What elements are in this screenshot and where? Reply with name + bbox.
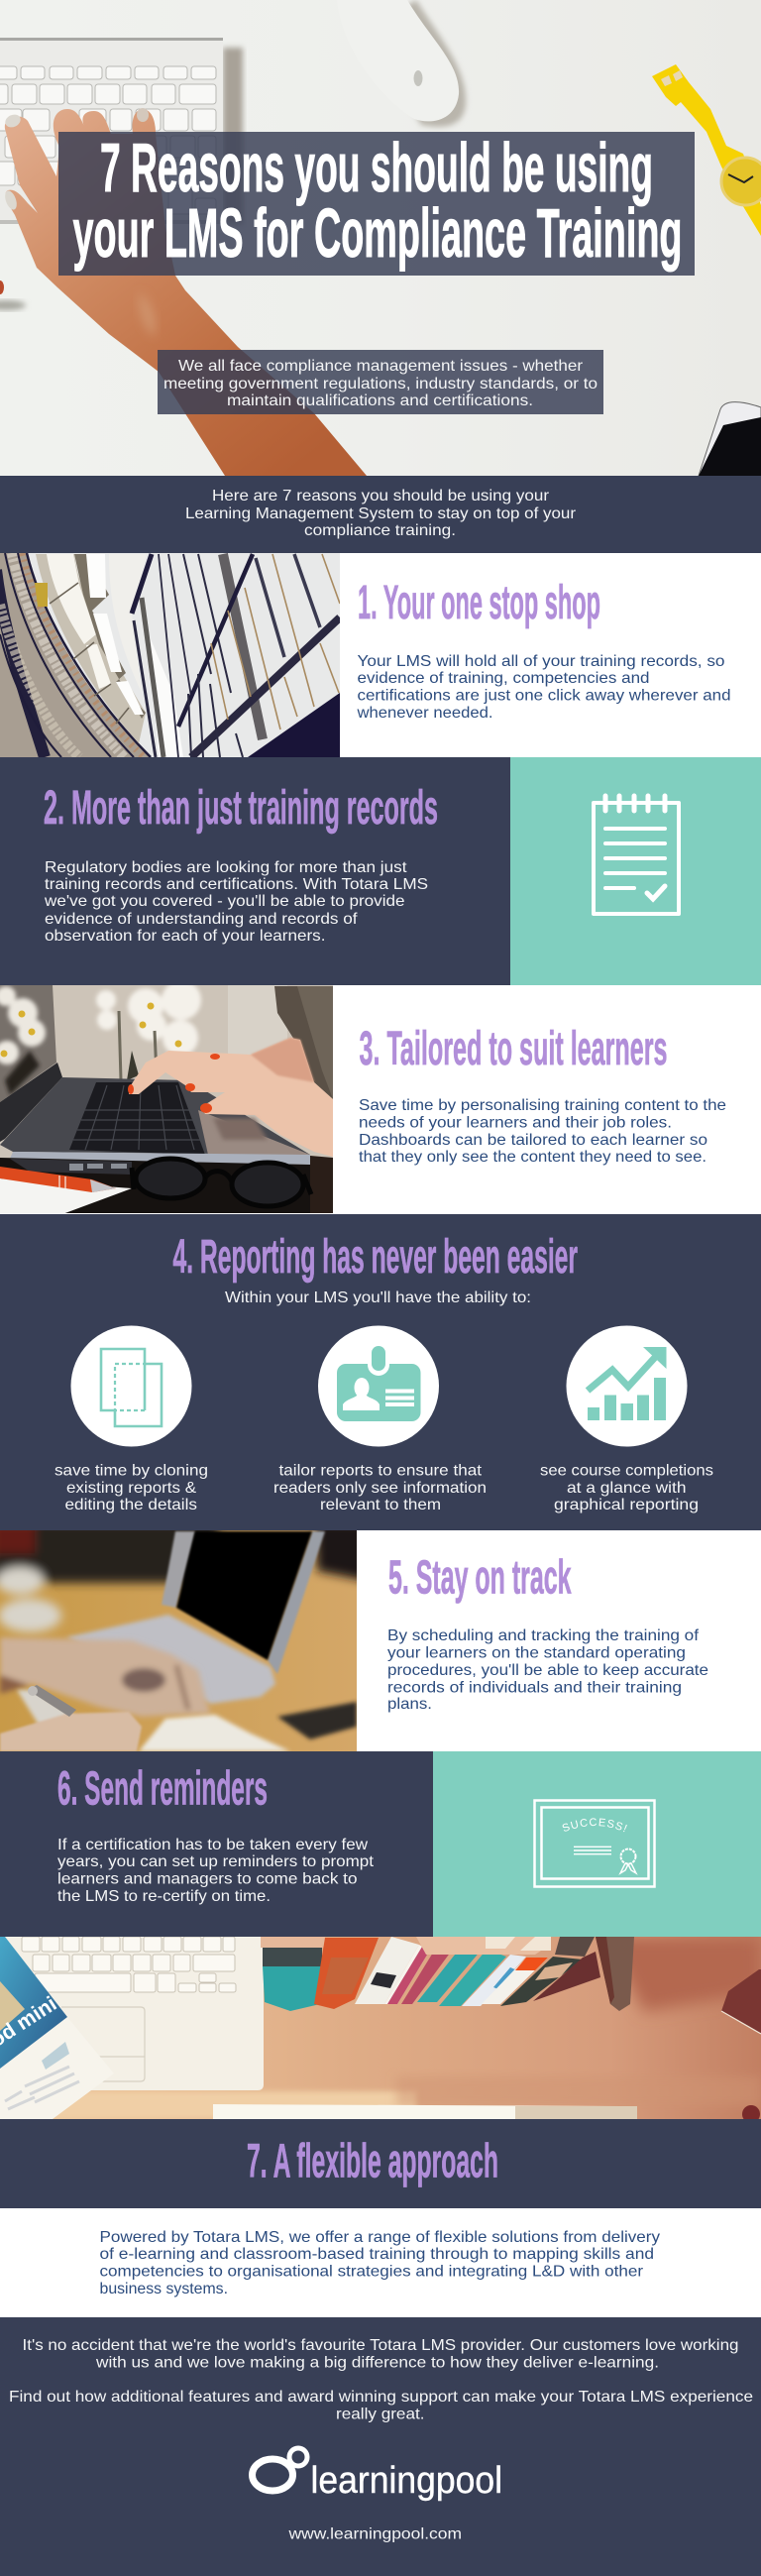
intro text — [185, 488, 577, 539]
subtitle text: maintain qualifications and certifications. — [227, 392, 533, 409]
closing text: It's no accident that we're the world's favourite Totara LMS provider. Our customers love working — [22, 2337, 739, 2354]
caption 2 — [273, 1463, 487, 1513]
body 7: competencies to organisational strategies and integrating L&D with other — [99, 2264, 644, 2280]
panel: reason 1 — [0, 553, 761, 757]
website address: www.learningpool.com — [287, 2525, 462, 2543]
watch — [652, 64, 761, 236]
body 5: procedures, you'll be able to keep accurate — [387, 1662, 708, 1679]
body 2: we've got you covered - you'll be able to provide — [44, 893, 405, 910]
body 2: Regulatory bodies are looking for more than just — [45, 859, 407, 876]
body 2: evidence of understanding and records of — [45, 911, 358, 928]
body 6: learners and managers to come back to — [57, 1871, 358, 1887]
icon: rising chart — [567, 1326, 688, 1447]
body 3: needs of your learners and their job roles. — [359, 1114, 672, 1132]
body 2: training records and certifications. With Totara LMS — [45, 876, 428, 893]
subtitle text — [163, 358, 598, 409]
body 5 — [387, 1627, 708, 1713]
body 3: Save time by personalising training content to the — [359, 1097, 726, 1114]
intro band — [0, 476, 761, 553]
subtitle text: We all face compliance management issues - whether — [178, 358, 584, 375]
panel: reason 2 — [0, 757, 761, 985]
title text — [73, 129, 682, 272]
panel: reason 5 — [0, 1530, 707, 1751]
photo: writing beside a laptop — [0, 1521, 367, 1751]
heading 7: 7. A flexible approach — [247, 2135, 498, 2188]
hero photo: desk with keyboard, mouse, hand, watch and phone — [0, 0, 761, 476]
panel: reason 3 — [0, 980, 761, 1214]
body 3: Dashboards can be tailored to each learner so — [359, 1132, 707, 1149]
body 1: certifications are just one click away wherever and — [357, 688, 731, 704]
caption 1 — [54, 1463, 208, 1513]
body 3: that they only see the content they need to see. — [359, 1149, 707, 1166]
body 1: whenever needed. — [356, 705, 493, 722]
body 2: observation for each of your learners. — [45, 928, 325, 945]
caption 2: relevant to them — [320, 1497, 441, 1513]
body 7: Powered by Totara LMS, we offer a range of flexible solutions from delivery — [99, 2229, 660, 2246]
icon: success certificate: SUCCESS! — [563, 1818, 627, 1832]
body 3 — [359, 1097, 726, 1166]
intro text: Here are 7 reasons you should be using your — [212, 488, 550, 504]
caption 1: save time by cloning — [54, 1463, 208, 1479]
caption 1: editing the details — [65, 1497, 197, 1513]
subtitle text: meeting government regulations, industry standards, or to — [163, 376, 598, 392]
body 1 — [356, 653, 731, 722]
caption 2: readers only see information — [273, 1480, 487, 1497]
caption 3 — [540, 1463, 713, 1513]
caption 3: at a glance with — [567, 1480, 686, 1497]
panel: reason 6 — [0, 1751, 761, 1937]
panel: footer — [0, 2317, 761, 2576]
body 1: evidence of training, competencies and — [357, 670, 650, 687]
body 7: of e-learning and classroom-based training through to mapping skills and — [99, 2246, 654, 2263]
body 5: records of individuals and their training — [387, 1679, 682, 1697]
body 6: the LMS to re-certify on time. — [57, 1888, 271, 1905]
body 5: plans. — [387, 1696, 432, 1713]
closing text: with us and we love making a big difference to how they deliver e-learning. — [95, 2355, 659, 2371]
photo: laptop, books and magazine on wooden desk — [0, 1937, 761, 2123]
laptop — [0, 1937, 264, 2090]
panel: reason 4 — [0, 1214, 761, 1530]
mouse — [408, 0, 469, 130]
icon: notepad with checkmark — [594, 796, 679, 914]
second hand edge and shadow — [0, 280, 26, 310]
icon: cloned documents — [71, 1326, 192, 1447]
body 6: years, you can set up reminders to prompt — [57, 1853, 375, 1870]
keyboard — [0, 38, 243, 224]
body 2 — [44, 859, 428, 945]
closing text — [9, 2337, 753, 2422]
magazine — [0, 1937, 114, 2119]
closing text: Find out how additional features and award winning support can make your Totara LMS experience — [9, 2389, 753, 2406]
closing text: really great. — [336, 2407, 424, 2422]
body 6 — [57, 1837, 375, 1905]
photo: library — [0, 553, 340, 757]
heading 6: 6. Send reminders — [57, 1762, 268, 1816]
body 7 — [99, 2229, 660, 2297]
caption 2: tailor reports to ensure that — [279, 1463, 483, 1479]
icon: success certificate — [533, 1799, 656, 1888]
caption 1: existing reports & — [66, 1480, 196, 1497]
body 5: your learners on the standard operating — [387, 1645, 686, 1661]
body 7: business systems. — [99, 2281, 228, 2297]
caption 3: see course completions — [540, 1463, 713, 1479]
title panel — [58, 129, 695, 276]
subtitle panel — [158, 350, 603, 414]
logo: learningpool: learningpool — [311, 2460, 502, 2502]
panel: reason 7 — [0, 2119, 761, 2317]
books — [261, 1937, 634, 2011]
phone — [699, 402, 761, 476]
intro text: Learning Management System to stay on top of your — [185, 505, 577, 522]
caption 3: graphical reporting — [554, 1497, 699, 1513]
body 5: By scheduling and tracking the training of — [387, 1627, 700, 1644]
icon: id badge — [318, 1326, 439, 1447]
intro line 4: Within your LMS you'll have the ability to: — [225, 1289, 531, 1306]
body 6: If a certification has to be taken every few — [57, 1837, 368, 1853]
heading 5: 5. Stay on track — [388, 1552, 572, 1604]
intro text: compliance training. — [304, 522, 456, 539]
logo: learningpool — [252, 2448, 502, 2502]
body 1: Your LMS will hold all of your training records, so — [357, 653, 725, 670]
photo: hands typing on a laptop — [0, 980, 333, 1214]
hand and arm — [3, 108, 367, 476]
